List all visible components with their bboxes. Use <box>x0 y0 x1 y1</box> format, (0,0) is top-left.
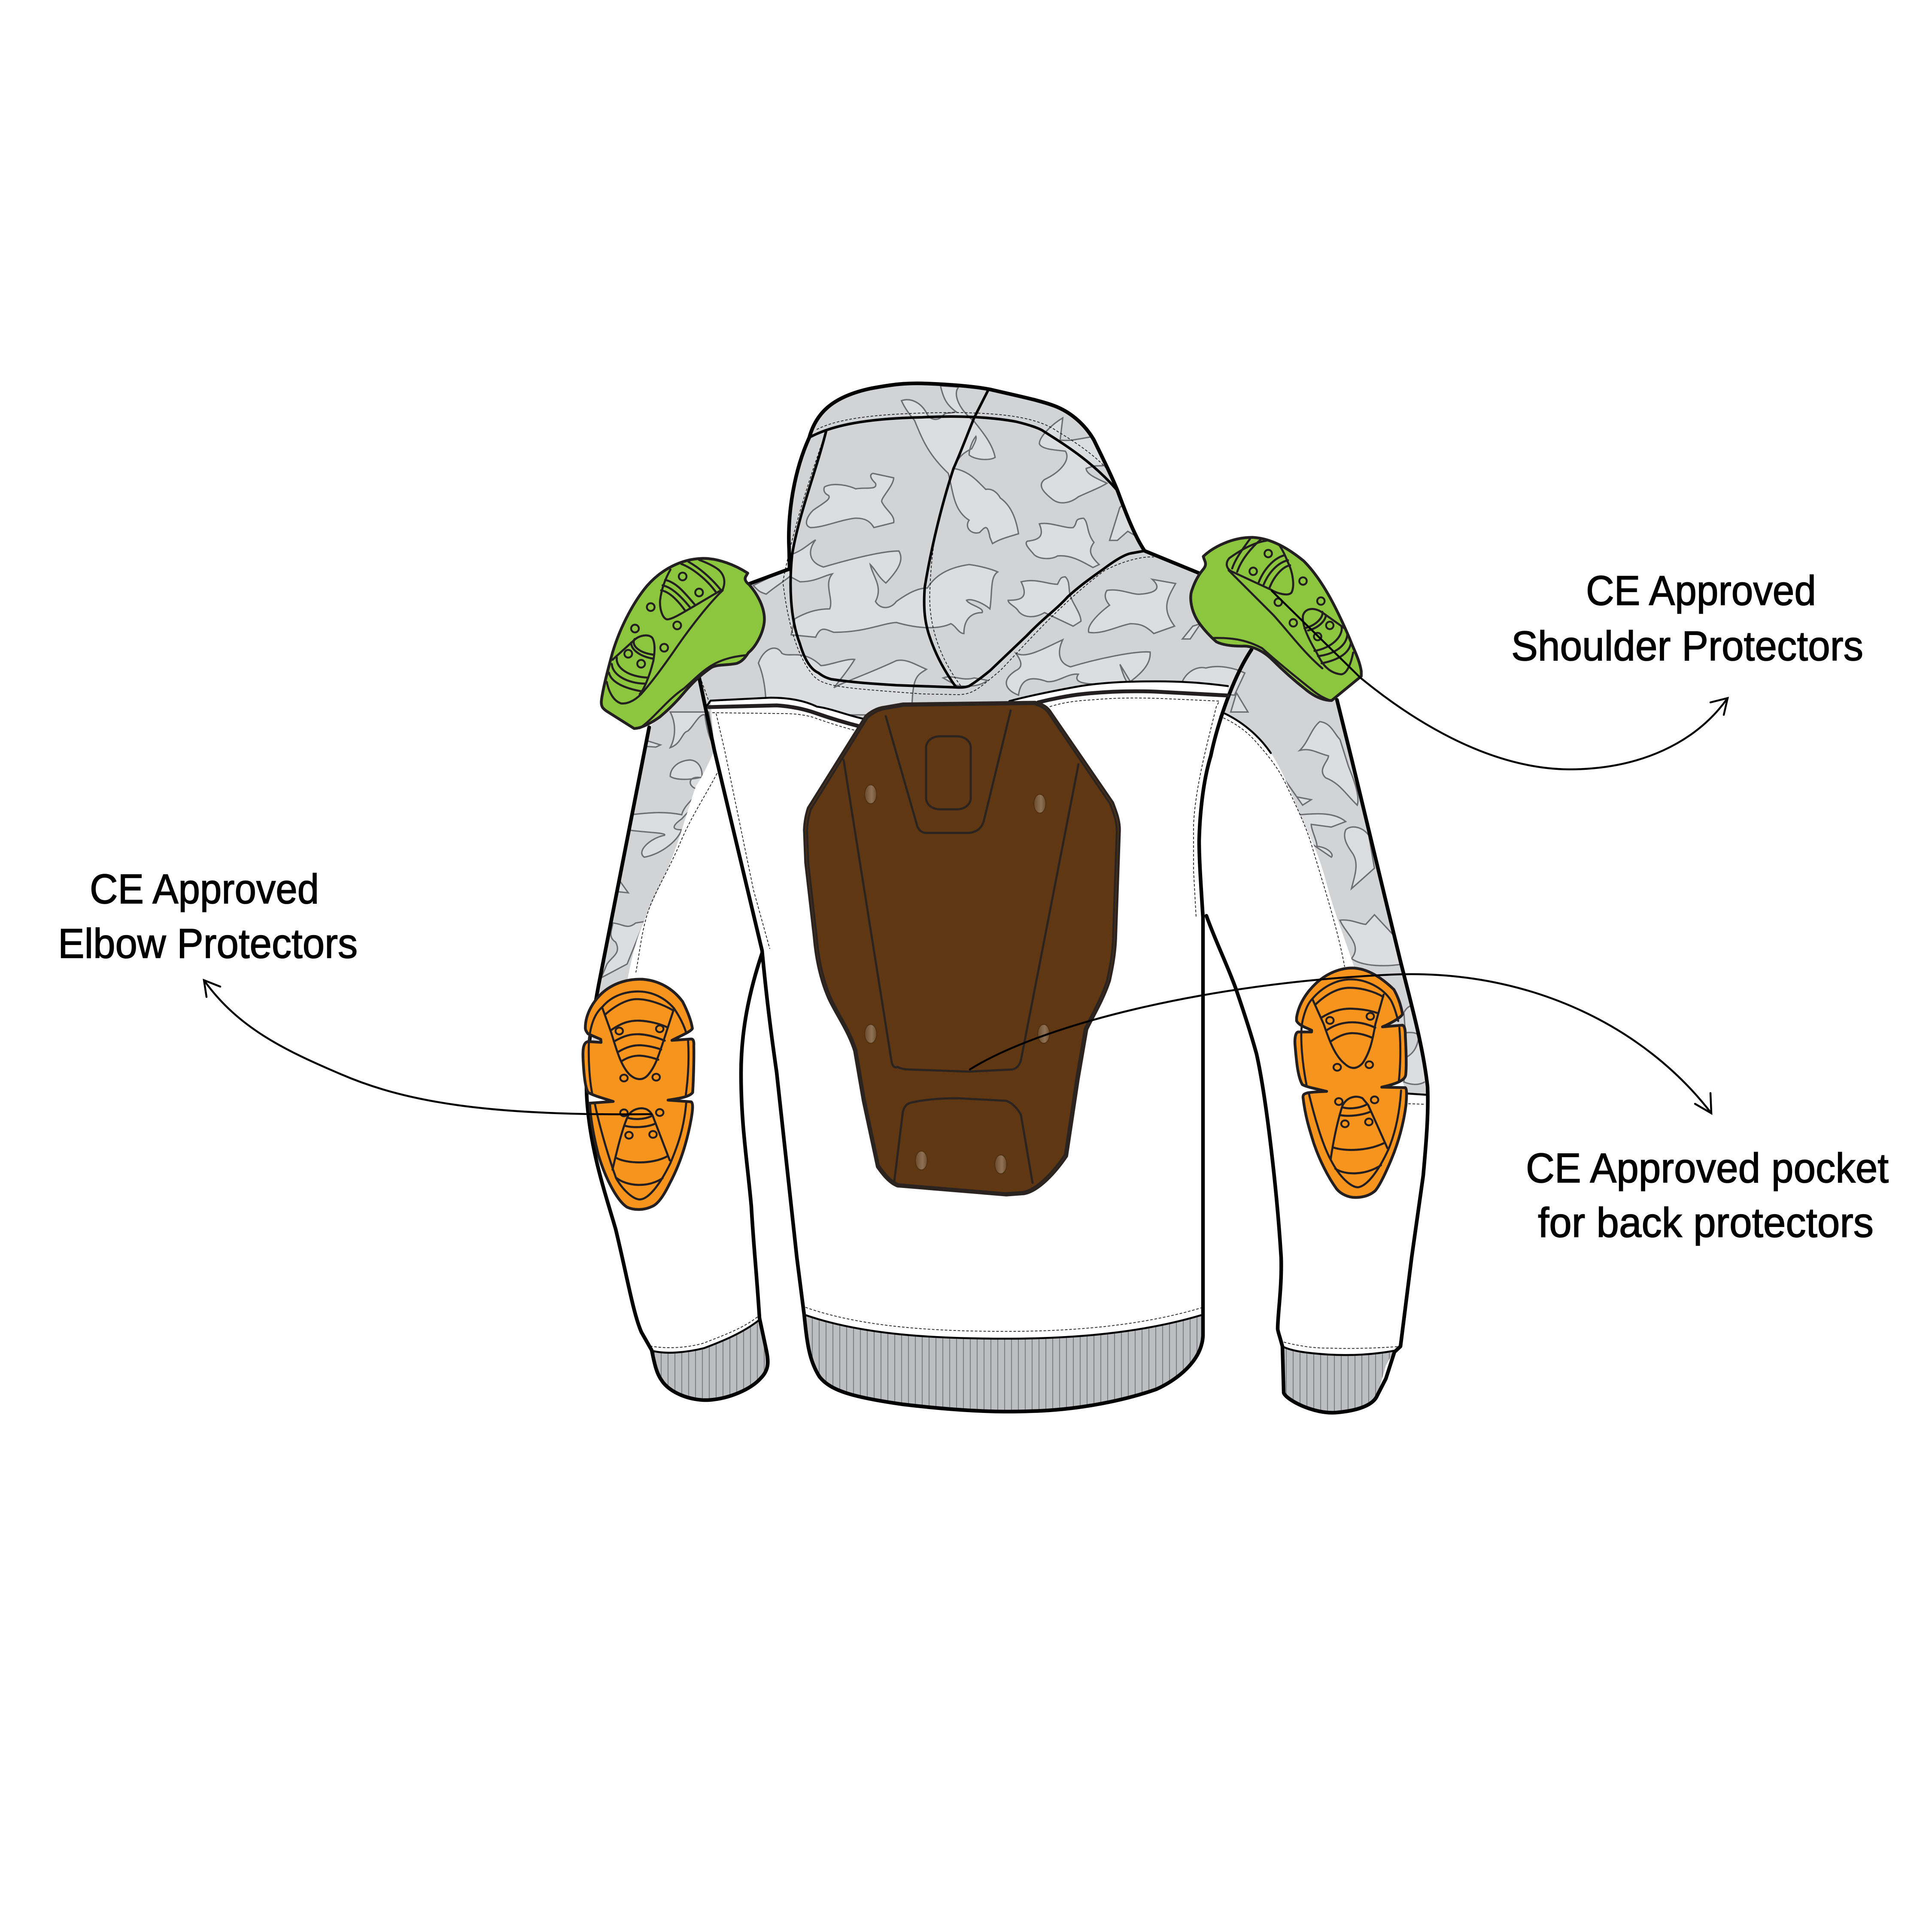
label: elbow protectors: Elbow Protectors <box>58 920 358 967</box>
label: back protector pocket <box>1526 1145 1889 1246</box>
protector lower panel <box>894 1098 1033 1183</box>
jacket illustration <box>586 383 1428 1413</box>
protector centre slot <box>926 736 971 809</box>
right elbow protector <box>1295 968 1406 1197</box>
main rib hem <box>804 1315 1203 1412</box>
back protector <box>804 702 1120 1195</box>
label: elbow protectors: CE Approved <box>90 866 319 912</box>
hood panel seams <box>790 391 1145 687</box>
torso outline <box>699 650 1252 1412</box>
left elbow protector <box>583 979 694 1209</box>
cuff, hem and collar seam lines <box>652 681 1426 1355</box>
label: elbow protectors <box>58 866 358 967</box>
arrow: shoulder protector <box>1272 591 1728 769</box>
left cuff rib <box>652 1320 768 1400</box>
label: back protector pocket: for back protectors <box>1538 1199 1874 1246</box>
arrow: back protector pocket <box>970 974 1711 1113</box>
stitching <box>636 413 1425 1349</box>
right shoulder protector <box>1191 538 1361 701</box>
left sleeve outline <box>586 727 768 1400</box>
hood and shoulder outline <box>748 383 1199 584</box>
label: back protector pocket: CE Approved pocket <box>1526 1145 1889 1191</box>
protector panel lines <box>844 760 1078 1072</box>
right cuff rib <box>1282 1346 1394 1413</box>
label: shoulder protectors <box>1511 567 1863 669</box>
left shoulder protector <box>601 559 764 729</box>
right sleeve outline <box>1206 700 1428 1413</box>
protector rivets <box>865 785 1050 1174</box>
protector inner contour <box>807 704 1117 1193</box>
label: shoulder protectors: CE Approved <box>1586 567 1816 614</box>
label: shoulder protectors: Shoulder Protectors <box>1511 623 1863 669</box>
grey hood, shoulders and upper sleeves <box>588 383 1426 1095</box>
jacket outlines <box>586 383 1428 1413</box>
arrow: elbow protector <box>204 980 651 1114</box>
camouflage pattern <box>601 386 1427 1084</box>
